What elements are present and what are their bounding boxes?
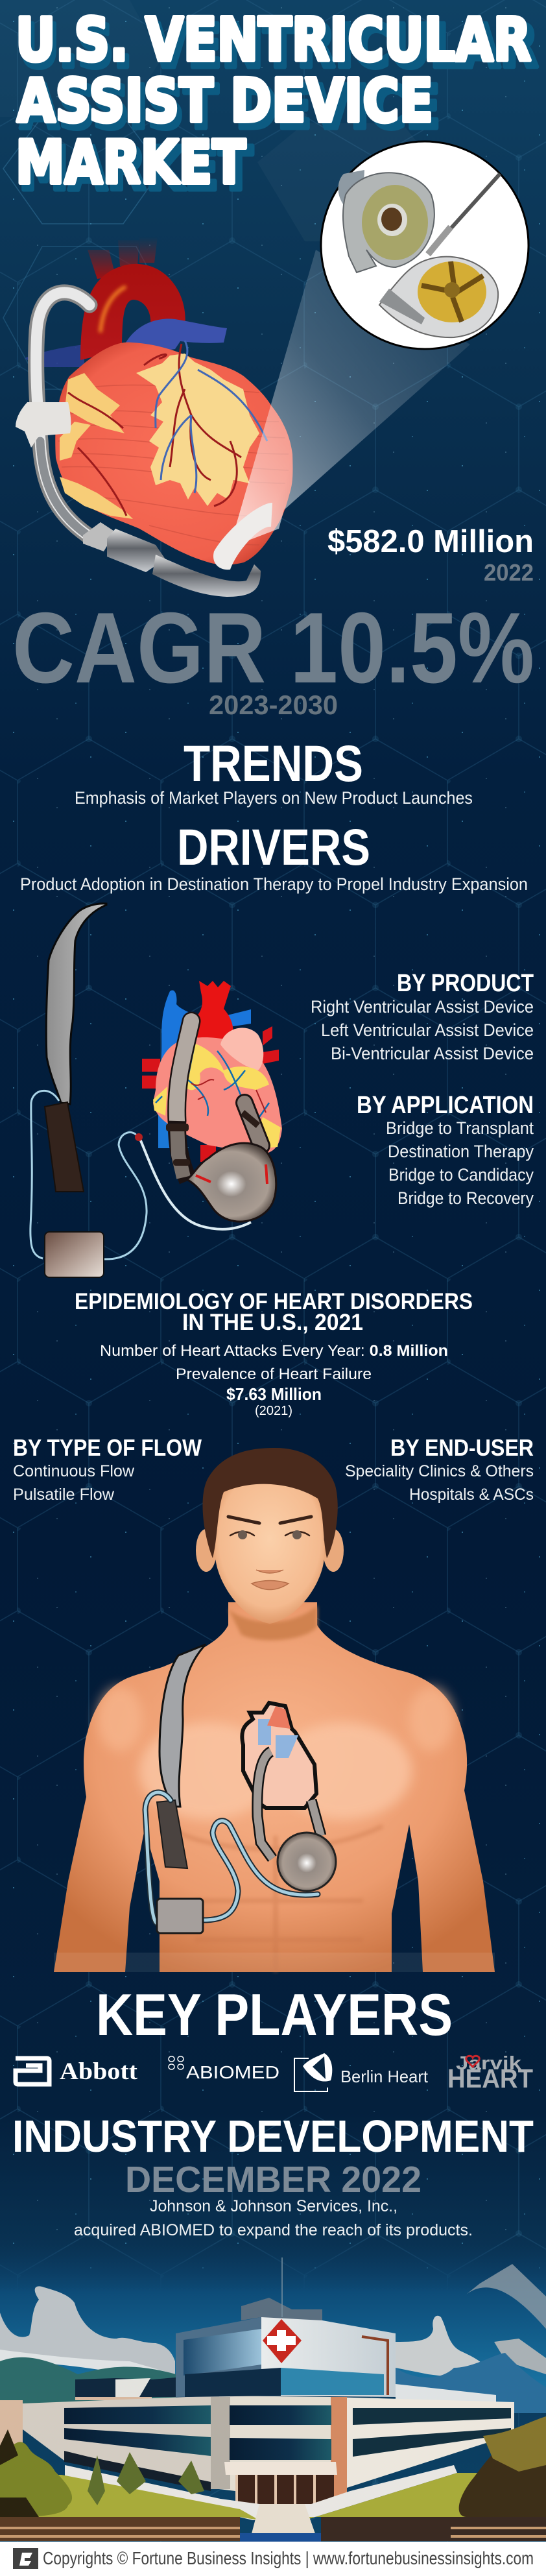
epidemiology: IN THE U.S., 2021 [182,1310,363,1335]
gold rotor [418,261,486,322]
steel connector [83,522,261,597]
man figure with implant [54,1448,495,1972]
device close-up circle [321,141,528,349]
bottom fade [54,1953,495,1972]
lower heart with LVAD [135,981,282,1229]
left block [23,2396,219,2489]
fence [0,2517,240,2541]
heart muscle [55,343,292,565]
ears [196,1529,217,1572]
rear right wing [396,2384,496,2403]
title [16,5,538,204]
forecourt paving [65,2465,457,2520]
battery case [45,1102,84,1192]
mid block [219,2396,331,2503]
right clouds [396,2316,487,2377]
trends [75,734,473,808]
logo: Abbott [16,2058,138,2085]
by product [311,970,534,1063]
inlet cylinder [338,170,364,209]
impeller housing [343,173,434,272]
left clouds [0,2286,175,2374]
fat and vessels [153,1041,281,1148]
drivers: Product Adoption in Destination Therapy to Propel Industry Expansion [20,874,528,894]
by application: Destination Therapy [388,1142,534,1161]
by application: Bridge to Recovery [398,1188,534,1208]
controller [45,1232,104,1277]
body tubes [145,1792,318,1923]
title: ASSIST DEVICE [20,73,440,142]
body heart [242,1703,316,1808]
industry development: Johnson & Johnson Services, Inc., [150,2197,398,2215]
body battery [157,1800,187,1868]
pump outlet cuff [213,503,272,570]
roof unit [241,2298,322,2320]
drivers [20,818,528,894]
central fat patch [136,354,259,506]
by type of flow [13,1434,202,1504]
body controller [157,1899,203,1933]
hospital scene [0,2238,546,2542]
small trees [88,2452,204,2505]
trends: TRENDS [184,734,363,792]
pump tube [36,293,89,535]
logo: Jarvik Heart: Jarvik [456,2053,522,2074]
drivers: DRIVERS [177,818,370,876]
epidemiology: Prevalence of Heart Failure [176,1366,372,1383]
right windows [353,2408,511,2425]
title: ASSIST DEVICE [17,66,433,136]
by end-user: Hospitals & ASCs [409,1486,534,1504]
epidemiology [75,1289,473,1418]
right tree [459,2420,546,2517]
logo: Berlin Heart [294,2053,429,2091]
market size value [327,524,534,586]
red cross sign [263,2319,302,2363]
by application [357,1092,534,1208]
by product: Right Ventricular Assist Device [311,997,534,1017]
logo: Jarvik Heart: HEART [447,2064,533,2093]
implant diagram: strap, battery, controller [30,904,147,1277]
entrance [224,2462,337,2475]
by application: Bridge to Candidacy [388,1165,534,1185]
face [215,1478,324,1624]
torso and arms [54,1602,495,1972]
centre windows [230,2405,331,2425]
chest highlights [139,1722,276,1820]
right block [331,2397,514,2504]
wires [30,1090,147,1259]
aorta highlight [101,287,125,331]
nose and mouth [252,1570,289,1589]
abdomen shading [178,1826,383,1972]
by type of flow: BY TYPE OF FLOW [13,1434,202,1461]
epidemiology: (2021) [255,1404,292,1418]
side buildings [0,2379,152,2459]
by type of flow: Pulsatile Flow [13,1486,115,1504]
rotor housing [379,257,498,337]
atrial lobe [220,1028,263,1070]
lawn [0,2473,546,2520]
market size value: 2022 [484,559,534,586]
walkway [250,2504,318,2541]
tube clamp [16,402,71,448]
industry development [12,2111,534,2239]
driveline [140,1139,251,1229]
neck shade [228,1606,317,1641]
inflow graft [177,1021,191,1121]
footer logo [13,2548,38,2569]
logo: Abiomed [169,2056,279,2082]
logo: Abbott: Abbott [60,2058,138,2085]
shoulder strap [46,904,106,1104]
pump [187,1143,276,1222]
by end-user [345,1434,534,1504]
title: MARKET [19,134,253,204]
pupils [238,1530,302,1539]
left fat patches [60,373,133,519]
shoulder highlights [97,1687,143,1751]
left vena cava [25,344,84,367]
tower [176,2317,261,2397]
heart body [153,1037,282,1155]
trends: Emphasis of Market Players on New Product Launches [75,788,473,808]
by end-user: BY END-USER [390,1434,534,1461]
right vena cava [123,319,227,355]
by type of flow: Continuous Flow [13,1462,135,1480]
sky [0,2238,546,2394]
corner pillars [331,2397,347,2504]
epidemiology: Number of Heart Attacks Every Year: 0.8 Million [100,1342,448,1360]
market size value: $582.0 Million [327,524,534,559]
body strap [160,1644,206,1807]
tower right frame [362,2337,388,2395]
aorta branches [88,237,158,279]
body graft [257,1751,321,1859]
vessels [158,1103,171,1148]
hair [202,1448,338,1558]
driveline cable [436,174,500,245]
by product: Bi-Ventricular Assist Device [331,1044,534,1063]
industry development: DECEMBER 2022 [125,2159,421,2200]
logo: Abiomed: ABIOMED [186,2062,279,2082]
CAGR: 2023-2030 [209,690,338,720]
body pump [278,1833,336,1891]
industry development: acquired ABIOMED to expand the reach of its products. [74,2221,473,2239]
by end-user: Speciality Clinics & Others [345,1462,534,1480]
left windows [64,2405,211,2424]
eyes and brows [228,1517,311,1535]
coronary arteries [68,344,241,516]
mast [281,2257,283,2317]
outflow graft [244,1103,261,1146]
left tree [0,2442,72,2517]
top heart illustration with pump tube [16,237,470,597]
key players heading: KEY PLAYERS [96,1982,453,2048]
footer [0,2542,546,2576]
by product: Left Ventricular Assist Device [321,1020,534,1040]
mountains [0,2357,176,2407]
by application: Bridge to Transplant [386,1118,534,1138]
muscle striations [58,385,289,545]
epidemiology: $7.63 Million [226,1384,322,1404]
logo: Berlin Heart: Berlin Heart [340,2067,429,2086]
epidemiology: EPIDEMIOLOGY OF HEART DISORDERS [75,1289,473,1314]
light beam [230,250,470,548]
rear left wing [75,2377,176,2397]
title: MARKET [16,128,246,197]
aorta arch [80,264,185,360]
